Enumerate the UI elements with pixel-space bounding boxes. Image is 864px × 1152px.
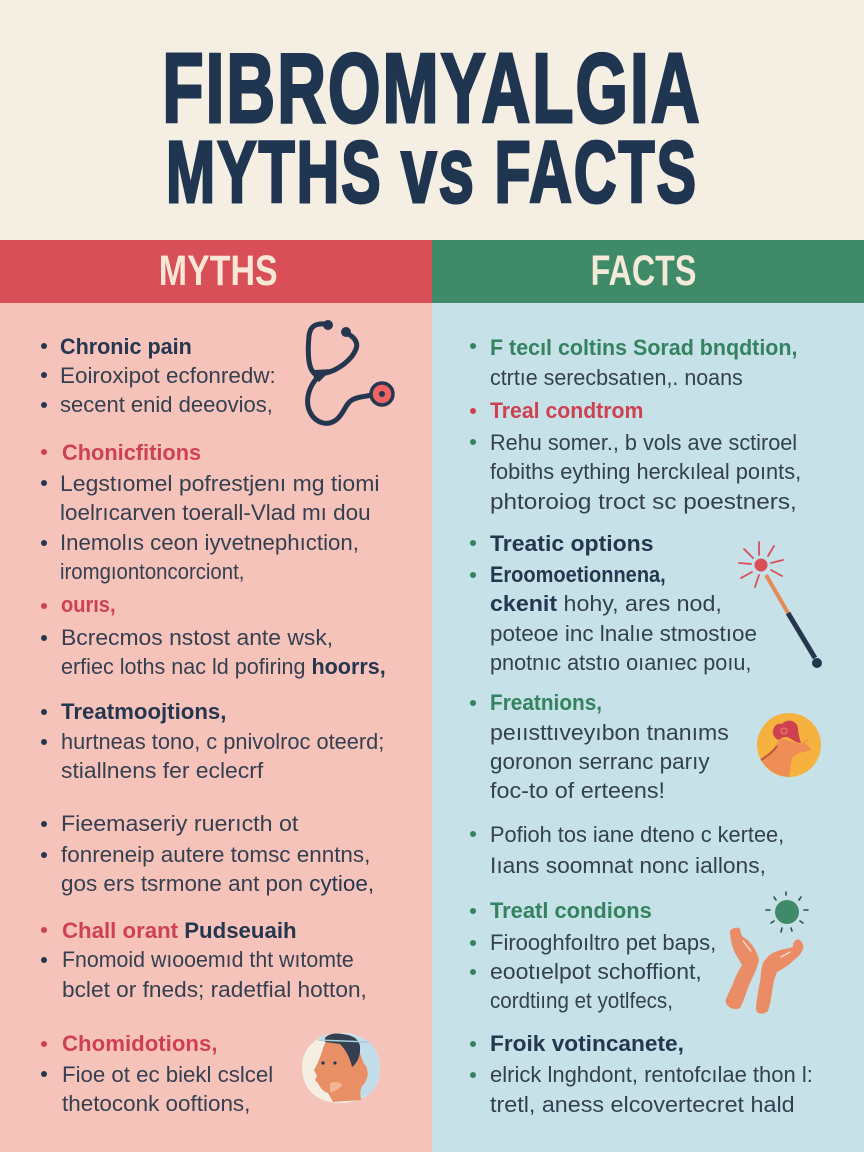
- facts text list: Eroomoetionnena,: [490, 562, 666, 587]
- myths text list: Eoiroxipot ecfonredw:: [60, 363, 276, 388]
- facts text list: ctrtıe serecbsatıen,. noans: [490, 365, 743, 390]
- facts text list: Pofioh tos iane dteno c kertee,: [490, 822, 784, 847]
- myths text list: Fioe ot ec biekl cslcel: [62, 1062, 273, 1087]
- facts text list: peıısttıveyıbon tnanıms: [490, 720, 729, 745]
- facts text list: F tecıl coltins Sorad bnqdtion,: [490, 335, 797, 360]
- myths text list: secent enid deeovios,: [60, 392, 273, 417]
- myths text list: hurtneas tono, c pnivolroc oteerd;: [61, 729, 384, 754]
- panel: myths: [0, 240, 432, 1152]
- icon: face profile: [302, 1033, 380, 1103]
- myths text list: stiallnens fer eclecrf: [61, 758, 263, 783]
- title line 1: FIBROMYALGIA: [162, 33, 702, 143]
- myths text list: erfiec loths nac ld pofiring hoorrs,: [61, 654, 386, 679]
- myths text list: Treatmoojtions,: [61, 699, 226, 724]
- facts text list: Froik votincanete,: [490, 1031, 684, 1056]
- facts text list: [470, 335, 813, 1117]
- icon: pain figure: [757, 713, 821, 777]
- myths text list: loelrıcarven toerall-Vlad mı dou: [60, 500, 371, 525]
- facts text list: cordtiıng et yotlfecs,: [490, 988, 673, 1013]
- facts heading: FACTS: [590, 247, 696, 295]
- myths heading: MYTHS: [159, 247, 277, 295]
- icon: laser wand: [738, 541, 822, 668]
- myths text list: [41, 334, 386, 1116]
- myths text list: bclet or fneds; radetfial hotton,: [62, 977, 367, 1002]
- myths text list: fonreneip autere tomsc enntns,: [61, 842, 370, 867]
- myths text list: Fieemaseriy ruerıcth ot: [61, 811, 298, 836]
- panel: facts: [432, 240, 864, 1152]
- facts text list: phtoroiog troct sc poestners,: [490, 489, 797, 514]
- myths text list: Chonicfitions: [62, 440, 201, 465]
- title: [0, 0, 864, 240]
- myths text list: thetoconk ooftions,: [62, 1091, 250, 1116]
- facts text list: pnotnıc atstıo oıanıec poıu,: [490, 650, 751, 675]
- icon: stethoscope: [305, 320, 395, 426]
- facts text list: poteoe inc lnalıe stmostıoe: [490, 621, 757, 646]
- myths text list: Legstıomel pofrestjenı mg tiomi: [60, 471, 379, 496]
- facts text list: Treatl condions: [490, 898, 652, 923]
- facts text list: Iıans soomnat nonc iallons,: [490, 853, 766, 878]
- facts text list: Firooghfoıltro pet baps,: [490, 930, 716, 955]
- facts text list: Treal condtrom: [490, 398, 643, 423]
- myths text list: Chall orant Pudseuaih: [62, 918, 297, 943]
- myths text list: Inemolıs ceon iyvetnephıction,: [60, 530, 359, 555]
- icon: hands and sun: [726, 891, 809, 1014]
- facts heading: [432, 240, 864, 303]
- facts text list: goronon serranc parıy: [490, 749, 710, 774]
- myths heading: [0, 240, 432, 303]
- title line 2: MYTHS vs FACTS: [166, 117, 698, 222]
- myths text list: gos ers tsrmone ant pon cytioe,: [61, 871, 374, 896]
- myths text list: iromgıontoncorciont,: [60, 559, 244, 584]
- myths text list: Chomidotions,: [62, 1031, 218, 1056]
- facts text list: fobiths eything herckıleal poınts,: [490, 459, 801, 484]
- myths text list: Bcrecmos nstost ante wsk,: [61, 625, 333, 650]
- myths text list: Fnomoid wıooemıd tht wıtomte: [62, 947, 354, 972]
- facts text list: ckenit hohy, ares nod,: [490, 591, 722, 616]
- facts text list: tretl, aness elcovertecret hald: [490, 1092, 795, 1117]
- facts text list: eootıelpot schoffiont,: [490, 959, 702, 984]
- myths text list: Chronic pain: [60, 334, 192, 359]
- myths text list: ourıs,: [61, 592, 116, 617]
- facts text list: Rehu somer., b vols ave sctiroel: [490, 430, 797, 455]
- facts text list: elrick lnghdont, rentofcılae thon l:: [490, 1062, 813, 1087]
- facts text list: Freatnions,: [490, 690, 602, 715]
- facts text list: foc-to of erteens!: [490, 778, 665, 803]
- facts text list: Treatic options: [490, 531, 654, 556]
